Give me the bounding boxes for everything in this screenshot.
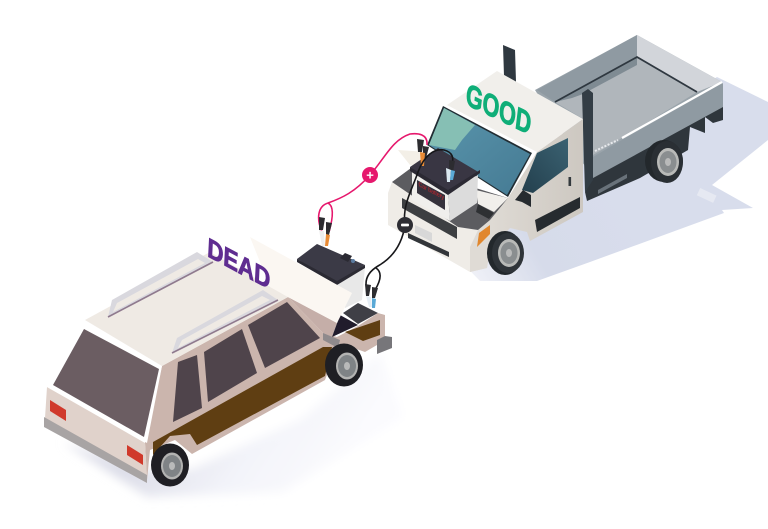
truck front wheel [487, 231, 524, 275]
windshield [427, 106, 532, 197]
car battery [297, 244, 365, 308]
positive jumper cable [319, 134, 429, 246]
shadow: truck [440, 77, 768, 281]
shadow: car [63, 353, 403, 497]
car side body [145, 297, 385, 480]
label: DEAD: DEAD [207, 232, 271, 296]
car [44, 232, 392, 486]
cab roof [447, 71, 583, 152]
negative jumper cable [365, 150, 455, 308]
rear window [47, 325, 162, 443]
car roof [85, 252, 288, 366]
minus badge [397, 217, 413, 233]
door window [522, 138, 568, 193]
cab side [470, 119, 583, 272]
orange indicator [477, 225, 490, 247]
truck chassis [585, 107, 723, 201]
roof rails [108, 252, 278, 353]
door trim strip [535, 197, 580, 232]
clamps on truck battery [446, 160, 455, 182]
car engine bay [288, 297, 385, 345]
rear upright post [503, 45, 516, 82]
truck flatbed [535, 35, 723, 178]
truck battery [410, 148, 480, 221]
side windows [173, 302, 320, 422]
battery label text: Car battery [418, 181, 445, 202]
car rear wheel [151, 444, 189, 486]
clamps on car battery [319, 217, 332, 246]
car front bumper [323, 333, 340, 348]
car front wheel [325, 344, 363, 386]
truck [388, 35, 723, 275]
rear lights [50, 400, 143, 465]
truck front [388, 150, 508, 272]
plus badge: + [366, 168, 374, 182]
clamps on truck battery [417, 139, 429, 166]
door handle [568, 177, 571, 186]
rear bumper [44, 417, 147, 483]
label: GOOD: GOOD [464, 76, 533, 142]
clamps on car [365, 284, 378, 308]
rear panel [45, 387, 147, 477]
open hood [250, 237, 352, 323]
side mirror [515, 190, 531, 207]
halftone patch in shadow [697, 188, 717, 203]
wood panel [153, 347, 332, 455]
battery label [417, 180, 445, 210]
cab post [582, 89, 593, 192]
truck rear wheel [645, 140, 683, 183]
